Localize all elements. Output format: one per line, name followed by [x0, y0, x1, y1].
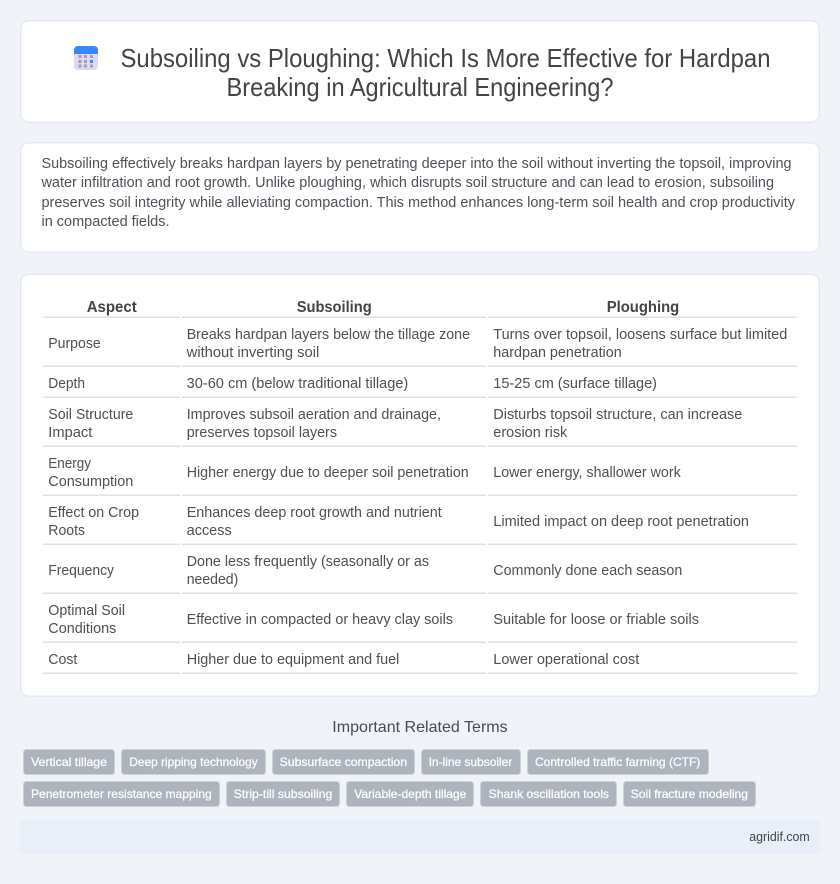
row: soil structure impact: erosion risk: [493, 425, 568, 441]
tag: Vertical tillage: [31, 755, 107, 769]
intro text: in compacted fields.: [42, 214, 170, 230]
row: optimal soil conditions: [48, 603, 699, 637]
row: purpose: [48, 327, 787, 361]
row: soil structure impact: Soil Structure: [48, 407, 133, 423]
row: purpose: Turns over topsoil, loosens surface but limited: [493, 327, 787, 343]
tag: [24, 782, 220, 806]
row: energy consumption: Consumption: [48, 474, 133, 490]
row: soil structure impact: Impact: [48, 425, 92, 441]
row: purpose: without inverting soil: [186, 345, 319, 361]
row: optimal soil conditions: Suitable for loose or friable soils: [493, 612, 699, 628]
header panel: [21, 21, 819, 122]
row: soil structure impact: Improves subsoil aeration and drainage,: [187, 407, 441, 423]
tag: Deep ripping technology: [129, 755, 258, 769]
tag: Controlled traffic farming (CTF): [535, 755, 700, 769]
row: effect on crop roots: Enhances deep root growth and nutrient: [187, 505, 442, 521]
row: depth: 15-25 cm (surface tillage): [493, 376, 657, 392]
row: soil structure impact: [48, 407, 742, 441]
table header: Ploughing: [607, 299, 679, 316]
row: effect on crop roots: [48, 505, 749, 539]
row: soil structure impact: Disturbs topsoil structure, can increase: [493, 407, 742, 423]
tag: Variable-depth tillage: [354, 787, 467, 801]
row: purpose: Purpose: [48, 336, 101, 352]
intro text: water infiltration and root growth. Unlike ploughing, which disrupts soil structure and can lead to erosion, subsoiling: [40, 175, 774, 191]
tag: [226, 782, 340, 806]
row: frequency: Done less frequently (seasonally or as: [187, 554, 429, 570]
related terms heading: Important Related Terms: [332, 719, 508, 736]
tag: Subsurface compaction: [280, 755, 407, 769]
footer bar: agridif.com: [749, 829, 810, 844]
row: energy consumption: Higher energy due to deeper soil penetration: [187, 465, 469, 481]
row: effect on crop roots: Roots: [48, 523, 85, 539]
table header: Aspect: [87, 299, 137, 316]
footer bar: [20, 820, 820, 854]
row: frequency: Frequency: [48, 563, 115, 579]
row: purpose: hardpan penetration: [493, 345, 622, 361]
row: purpose: Breaks hardpan layers below the tillage zone: [187, 327, 470, 343]
title: Subsoiling vs Ploughing: Which Is More Effective for Hardpan: [120, 45, 770, 73]
title: Breaking in Agricultural Engineering?: [226, 74, 614, 102]
row: cost: Cost: [48, 652, 77, 668]
tag: In-line subsoiler: [429, 755, 512, 769]
row: depth: [48, 376, 657, 392]
row: frequency: needed): [187, 572, 238, 588]
intro text: Subsoiling effectively breaks hardpan layers by penetrating deeper into the soil without inverting the topsoil, improving: [42, 156, 792, 172]
table header: [87, 299, 679, 316]
intro panel: [21, 143, 819, 252]
row: effect on crop roots: Limited impact on deep root penetration: [493, 514, 749, 530]
row: effect on crop roots: Effect on Crop: [48, 505, 139, 521]
tag: [346, 782, 474, 806]
icon: calendar: [74, 46, 98, 70]
tag: [480, 782, 616, 806]
related term tags: [24, 750, 756, 806]
tag: Shank oscillation tools: [489, 787, 609, 801]
table header: Subsoiling: [297, 299, 372, 316]
row: optimal soil conditions: Conditions: [48, 621, 116, 637]
row: soil structure impact: preserves topsoil layers: [187, 425, 337, 441]
row: depth: Depth: [48, 376, 85, 392]
intro text: preserves soil integrity while alleviating compaction. This method enhances long-term soil health and crop productivity: [42, 195, 796, 211]
tag: [528, 750, 708, 774]
row: cost: Lower operational cost: [493, 652, 639, 668]
row: optimal soil conditions: Effective in compacted or heavy clay soils: [187, 612, 453, 628]
row: energy consumption: [48, 456, 681, 490]
row: optimal soil conditions: Optimal Soil: [48, 603, 125, 619]
row: cost: Higher due to equipment and fuel: [187, 652, 399, 668]
tag: Soil fracture modeling: [631, 787, 748, 801]
tag: Penetrometer resistance mapping: [31, 787, 212, 801]
row: cost: [48, 652, 639, 668]
comparison table panel: [21, 274, 819, 696]
row: frequency: [48, 554, 682, 588]
tag: [24, 750, 114, 774]
row: energy consumption: Energy: [48, 456, 92, 472]
tag: [624, 782, 756, 806]
tag: [122, 750, 266, 774]
row: depth: 30-60 cm (below traditional tillage): [187, 376, 408, 392]
tag: [422, 750, 520, 774]
row: energy consumption: Lower energy, shallower work: [493, 465, 681, 481]
title: [120, 45, 770, 102]
row: frequency: Commonly done each season: [493, 563, 682, 579]
intro text: [40, 156, 796, 230]
row: effect on crop roots: access: [187, 523, 232, 539]
tag: [272, 750, 414, 774]
tag: Strip-till subsoiling: [234, 787, 332, 801]
